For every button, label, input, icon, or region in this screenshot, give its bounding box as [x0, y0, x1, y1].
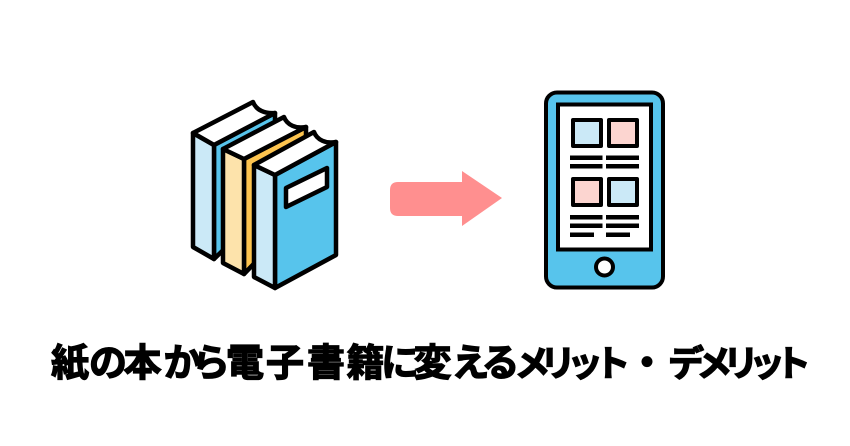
icon: middle orange book: [223, 117, 306, 274]
thumbnail: top left: [573, 120, 601, 146]
icon: stack of paper books: [193, 102, 336, 288]
home button: [596, 258, 613, 276]
thumbnail: top right: [609, 120, 637, 146]
thumbnail: bottom left: [573, 179, 601, 205]
title: 紙の本から電子書籍に変える: [51, 343, 520, 385]
title: メリット: [514, 343, 631, 384]
icon: left blue book: [193, 102, 275, 259]
arrow: [390, 171, 502, 226]
title: デメリット: [668, 343, 811, 384]
book cover label: [286, 168, 327, 207]
title: ・: [628, 343, 666, 385]
icon: tablet with e-book: [546, 92, 663, 288]
icon: right blue book: [254, 132, 336, 288]
thumbnail: bottom right: [609, 179, 637, 205]
tablet body: [546, 92, 663, 288]
tablet screen: [558, 104, 651, 250]
text lines: [570, 156, 639, 237]
